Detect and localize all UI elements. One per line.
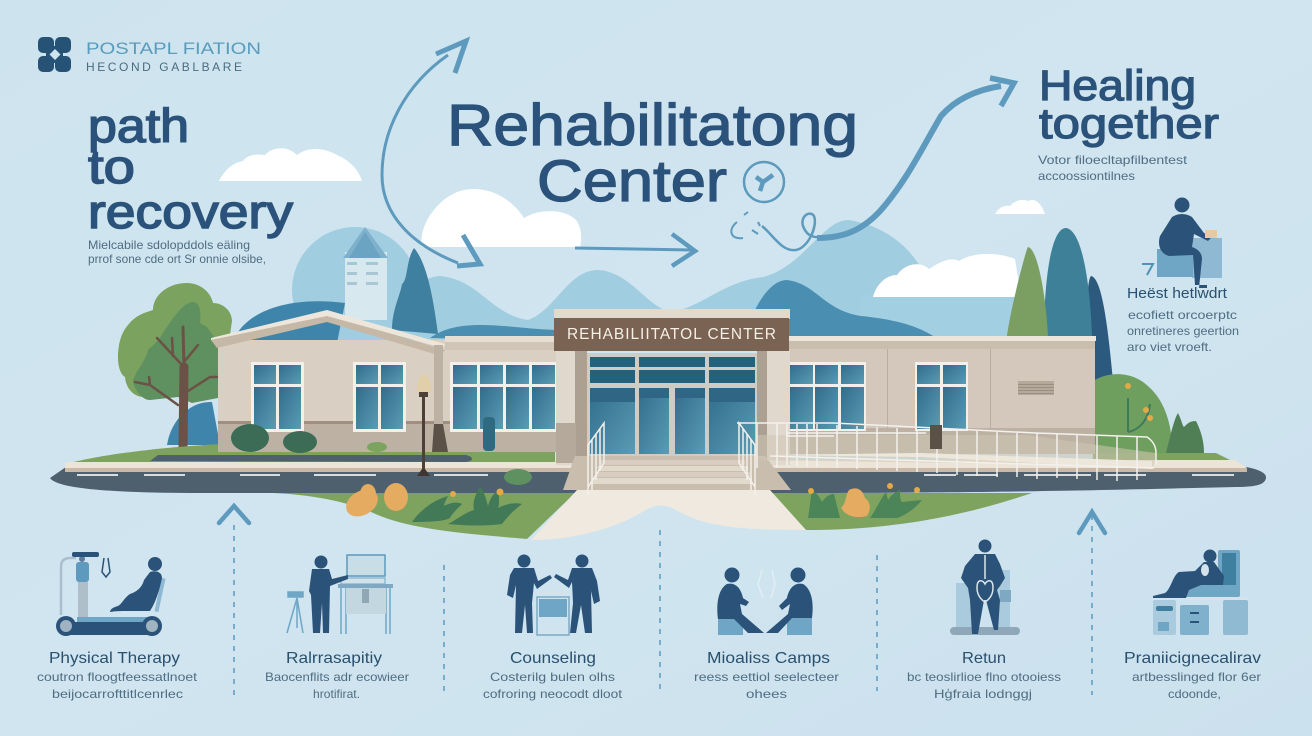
walkway <box>531 490 806 540</box>
text block: left description: Mielcabile sdolopddols eäling <box>88 238 250 252</box>
description: Baocenflits adr ecowieer <box>265 670 409 684</box>
tree: left <box>118 283 232 447</box>
distant building <box>343 227 388 320</box>
panel: wellness camps <box>694 568 839 701</box>
description <box>907 670 1061 701</box>
tree: teal behind left wing <box>392 248 438 334</box>
heading: Healing together: Healing <box>1039 62 1196 110</box>
text block: healing network: Heëst hetlwdrt <box>1127 285 1228 302</box>
arrow: center right <box>575 234 695 266</box>
description: beijocarrofttitlcenrlec <box>52 687 183 701</box>
building: right wing <box>785 336 1096 454</box>
heading: path to recovery: to <box>88 140 135 193</box>
glass entrance <box>587 353 757 456</box>
road <box>50 467 1266 493</box>
bush: right side <box>1093 374 1204 453</box>
trees: right cluster <box>1007 228 1113 380</box>
description: cdoonde, <box>1168 687 1221 701</box>
icon: person at workstation <box>287 555 393 634</box>
cloud: upper left <box>219 148 362 181</box>
lane markings <box>77 474 1234 476</box>
heading: path to recovery: path <box>88 99 189 152</box>
text block: healing description: accoossiontilnes <box>1038 169 1135 183</box>
heading: Rehabilitatong Center: Rehabilitatong <box>447 93 858 158</box>
description: artbesslinged flor 6er <box>1132 670 1261 684</box>
logo <box>38 37 261 74</box>
label: Retun <box>962 650 1006 667</box>
description <box>37 670 198 701</box>
sidewalk <box>65 462 585 472</box>
flowers: right bed <box>808 483 922 518</box>
grass patch right <box>770 493 1032 530</box>
description <box>1132 670 1261 701</box>
icon: therapy machine <box>56 552 165 636</box>
heading: path to recovery: recovery <box>88 185 294 238</box>
text block: healing network: aro viet vroeft. <box>1127 340 1212 354</box>
sign text: REHABILIITATOL CENTER <box>567 326 776 343</box>
icon: reclining person and cabinets <box>1151 550 1248 635</box>
label: Mioaliss Camps <box>707 650 830 667</box>
vent <box>1018 381 1054 395</box>
text block: left description: prrof sone cde ort Sr onnie olsibe, <box>88 252 266 266</box>
building: windows left <box>251 362 558 432</box>
logo tagline: HECOND GABLBARE <box>86 60 242 74</box>
panel: return <box>907 540 1061 701</box>
upper drive <box>150 455 472 462</box>
arrow: left arc <box>382 41 480 266</box>
text block: healing description <box>1038 153 1188 183</box>
ground: grass and road <box>50 443 1266 540</box>
cloud: small right <box>995 200 1045 214</box>
panel: rehabilitation <box>265 555 409 701</box>
panel: counseling <box>483 554 623 701</box>
text block: healing network: onretineres geertion <box>1127 324 1239 338</box>
text block: left description <box>88 238 266 266</box>
sign canopy <box>554 309 790 351</box>
description: Costerilg bulen olhs <box>490 670 615 684</box>
icon: two seated people <box>717 568 813 635</box>
heading: Healing together <box>1039 62 1219 148</box>
label: Praniicignecalirav <box>1124 650 1261 667</box>
label: Physical Therapy <box>49 650 180 667</box>
description: hrotifirat. <box>313 687 360 701</box>
description <box>265 670 409 701</box>
cloud: right <box>873 254 1021 297</box>
label: Ralrrasapitiy <box>286 650 382 667</box>
street lamp <box>417 374 431 476</box>
building: central entrance <box>554 309 790 465</box>
hills: background landscape <box>167 220 1020 445</box>
heading: Rehabilitatong Center: Center <box>537 149 727 214</box>
heading: Healing together: together <box>1039 100 1219 148</box>
description <box>483 670 623 701</box>
flowers: left bed <box>341 483 522 526</box>
building: left wing <box>211 310 560 452</box>
steps <box>563 423 791 495</box>
grass patch left <box>273 493 575 539</box>
panel: practical care <box>1124 550 1261 701</box>
bushes and lamp <box>231 374 532 485</box>
description: reess eettiol seelecteer <box>694 670 839 684</box>
description: cofroring neocodt dloot <box>483 687 623 701</box>
description: Hģfraia lodnggj <box>934 687 1032 701</box>
icon: circled check by title <box>744 162 784 202</box>
icon: two people <box>507 554 600 635</box>
text block: healing description: Votor filoecltapfilbentest <box>1038 153 1188 167</box>
label: Counseling <box>510 650 596 667</box>
cloud: center <box>421 189 581 247</box>
heading: path to recovery <box>88 99 294 238</box>
icon: logo mark <box>38 37 71 72</box>
description: coutron floogtfeessatlnoet <box>37 670 198 684</box>
accessibility ramp <box>737 423 1156 481</box>
description: bc teoslirlioe flno otooiess <box>907 670 1061 684</box>
dividers with arrows <box>219 506 1105 695</box>
icon: person seated at desk <box>1142 198 1222 288</box>
arrow: rising curve <box>731 78 1014 250</box>
text block: healing network: ecofiett orcoerptc <box>1128 308 1237 322</box>
panel: physical therapy <box>37 552 198 701</box>
text block: healing network <box>1127 285 1239 354</box>
window <box>788 362 968 431</box>
description <box>694 670 839 701</box>
logo name: POSTAPL FIATION <box>86 40 261 58</box>
heading: Rehabilitatong Center <box>447 93 858 214</box>
description: ohees <box>746 687 787 701</box>
icon: standing person with equipment <box>950 540 1020 635</box>
